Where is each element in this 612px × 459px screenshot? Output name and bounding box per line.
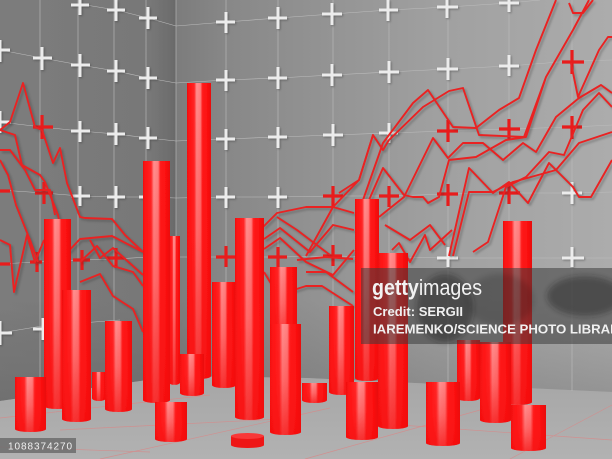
bar 329 [329, 306, 354, 395]
bar 457 [457, 340, 480, 401]
tall bar centre back [187, 83, 211, 379]
bar 270 lower [270, 324, 301, 435]
bar behind left [169, 236, 180, 385]
bar 235 tall [235, 218, 264, 420]
red wall crosses [0, 50, 584, 272]
short bar behind tall pillars [92, 372, 106, 401]
image id label [0, 438, 76, 453]
short bar 511 [511, 405, 546, 451]
red line charts [0, 0, 612, 332]
image id label: 1088374270 [8, 442, 72, 452]
bar 212 [212, 282, 236, 388]
tall bar 44 [44, 219, 71, 409]
credit line: Credit: SERGII [373, 304, 463, 319]
white wall crosses [0, 0, 584, 345]
bar 270 upper [270, 267, 297, 340]
short bar 346 [346, 382, 378, 440]
wall base shading [0, 300, 612, 401]
watermark panel [361, 268, 612, 344]
bar 480 [480, 342, 511, 423]
back wall [176, 0, 612, 392]
floor grid lines [0, 395, 612, 459]
disc bar 231 [231, 433, 264, 448]
bar 105 [105, 321, 132, 412]
tall bar 143 [143, 161, 170, 403]
bar 378 [378, 253, 408, 429]
bar 503 tall [503, 221, 532, 405]
bar 62 [62, 290, 91, 422]
bar back right of centre [355, 199, 379, 381]
small bar 302 [302, 383, 327, 403]
bar 180 short [180, 354, 204, 396]
short bar 426 [426, 382, 460, 446]
floor [0, 376, 612, 459]
getty logo text: gettyimages [372, 275, 482, 300]
short bar 155 [155, 402, 187, 442]
short bar 15 [15, 377, 46, 432]
watermark dark shapes [417, 274, 612, 342]
left wall [0, 0, 176, 401]
